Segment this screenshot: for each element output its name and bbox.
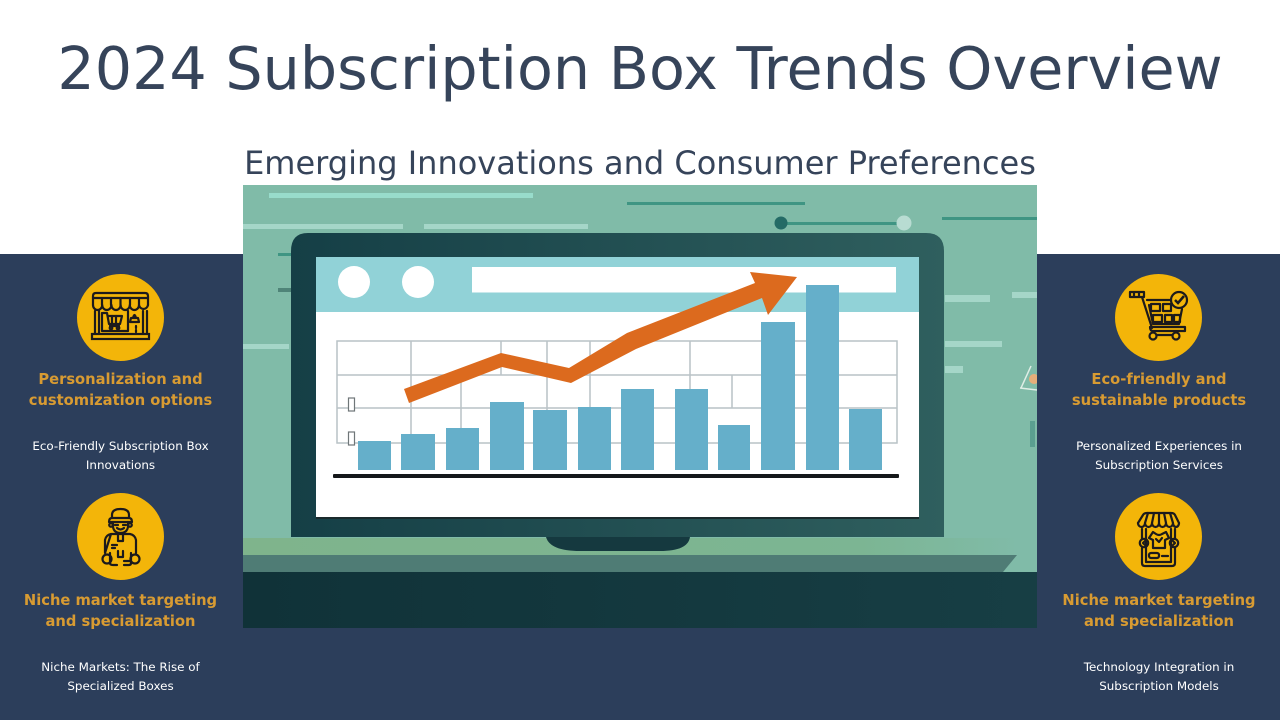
heading: Niche market targeting and specialization — [24, 592, 217, 630]
heading: Niche market targeting and specialization — [1062, 592, 1256, 630]
subtitle: Emerging Innovations and Consumer Preferences — [244, 144, 1036, 182]
laptop frame — [291, 233, 944, 537]
icon: mobile storefront — [1115, 493, 1202, 580]
description: Niche Markets: The Rise of Specialized Boxes — [41, 660, 200, 693]
feature: personalization — [29, 274, 212, 472]
heading: Eco-friendly and sustainable products — [1072, 371, 1246, 409]
chart grid — [337, 341, 897, 443]
icon: delivery worker — [77, 493, 164, 580]
desk — [243, 538, 1018, 555]
heading: Personalization and customization options — [29, 371, 212, 409]
dark background panel — [0, 254, 1280, 720]
screen — [316, 257, 919, 518]
icon: shopping cart with check — [1115, 274, 1202, 361]
description: Eco-Friendly Subscription Box Innovations — [32, 439, 209, 472]
feature: niche market left — [24, 493, 217, 693]
feature: niche market right — [1062, 493, 1256, 693]
baseline — [333, 474, 899, 478]
trend arrow — [404, 272, 797, 403]
title: 2024 Subscription Box Trends Overview — [57, 35, 1223, 103]
icon: storefront with cart — [77, 274, 164, 361]
description: Technology Integration in Subscription Models — [1084, 660, 1234, 693]
feature: eco-friendly — [1072, 274, 1246, 472]
central illustration: laptop with rising bar chart — [243, 185, 1037, 628]
bars — [358, 285, 882, 470]
small chart ticks — [348, 398, 354, 445]
description: Personalized Experiences in Subscription Services — [1076, 439, 1242, 472]
